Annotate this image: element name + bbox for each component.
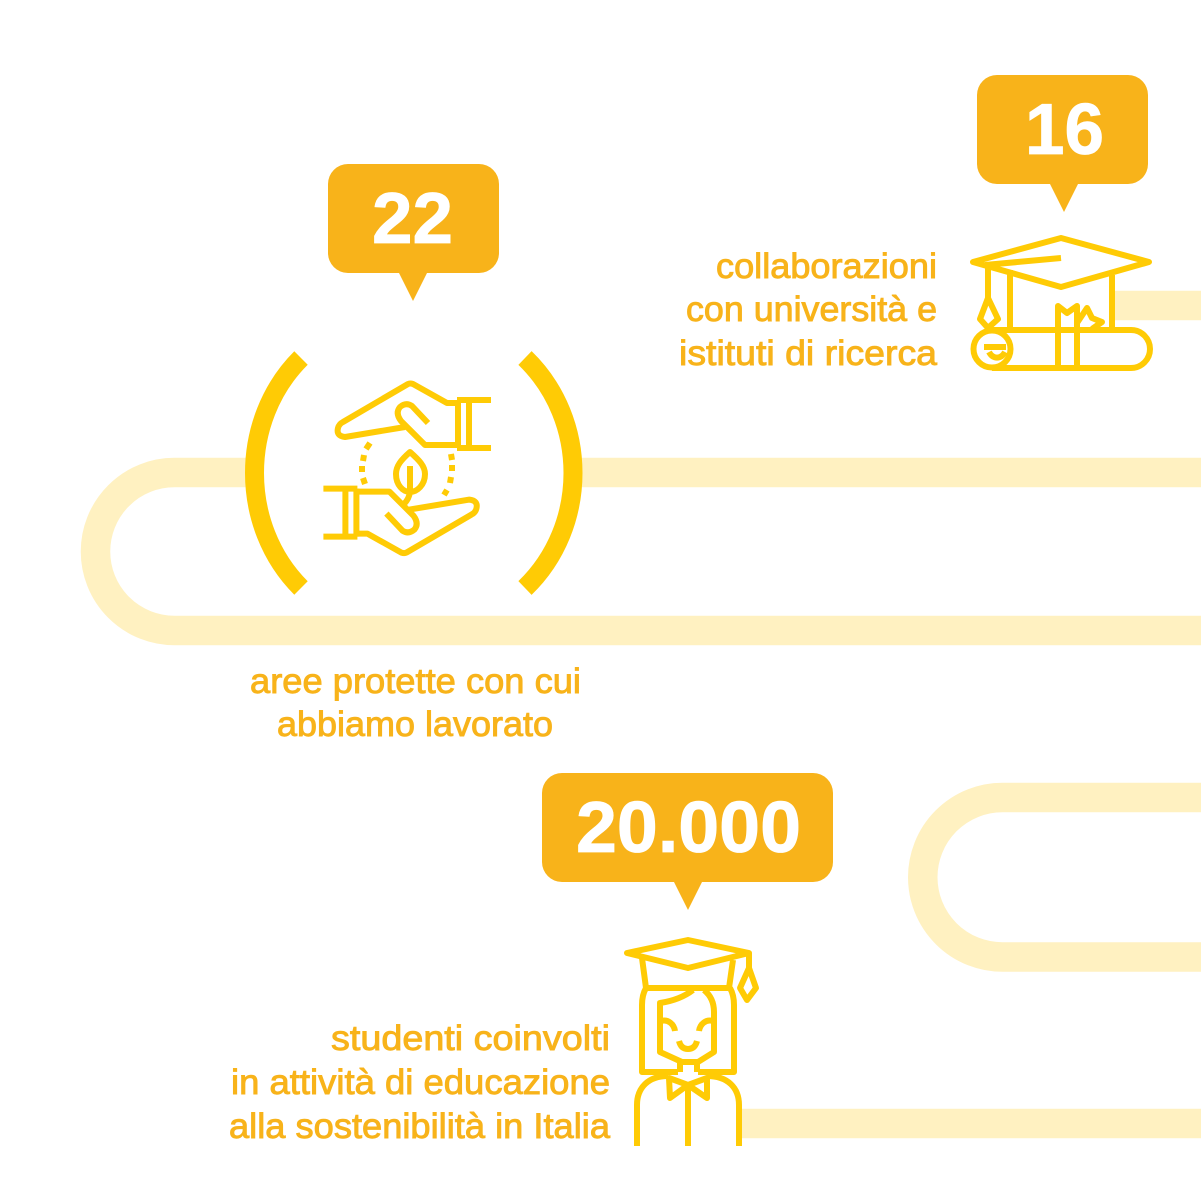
- parenthesis: left: [254, 358, 301, 588]
- path band: top right segment: [1113, 291, 1201, 320]
- text: students: [229, 1019, 611, 1146]
- callout: 22: 22: [372, 179, 453, 259]
- text: collaborations: [679, 247, 938, 373]
- text: students: studenti coinvolti: [331, 1019, 610, 1058]
- callout: 16: [977, 75, 1148, 212]
- parenthesis: right: [525, 358, 573, 588]
- icon: graduation cap and diploma: [973, 238, 1150, 368]
- path band: loop around protected areas: [96, 472, 1201, 630]
- text: protected areas: abbiamo lavorato: [277, 705, 553, 744]
- text: protected areas: [250, 662, 581, 744]
- callout: 20.000: 20.000: [576, 788, 801, 868]
- text: protected areas: aree protette con cui: [250, 662, 581, 701]
- text: collaborations: con università e: [686, 290, 937, 329]
- icon: graduate student: [627, 940, 756, 1146]
- text: students: alla sostenibilità in Italia: [229, 1107, 611, 1146]
- callout: 20.000: [542, 773, 833, 910]
- callout: 16: 16: [1025, 90, 1104, 170]
- callout: 22: [328, 164, 499, 301]
- icon: hands protecting a leaf: [323, 384, 491, 553]
- text: students: in attività di educazione: [231, 1063, 610, 1102]
- text: collaborations: istituti di ricerca: [679, 334, 938, 373]
- path band: lower right loop: [923, 798, 1201, 957]
- text: collaborations: collaborazioni: [716, 247, 937, 286]
- path band: bottom segment: [741, 1109, 1201, 1138]
